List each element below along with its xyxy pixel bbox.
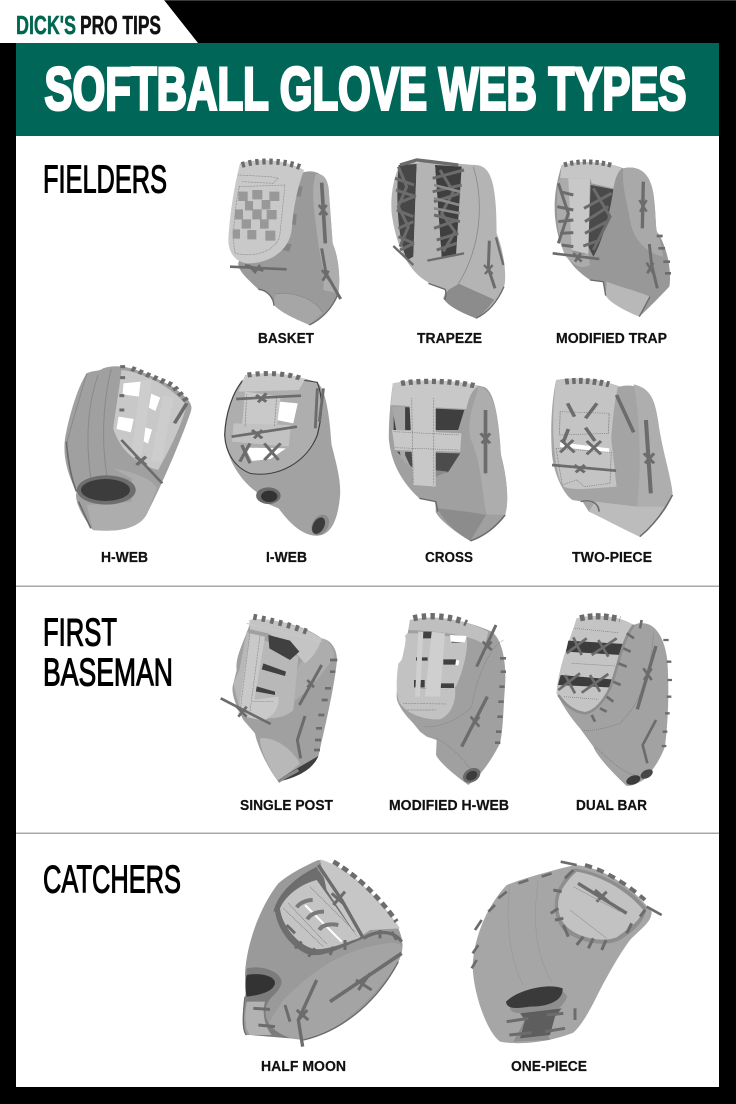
label: two-piece: TWO-PIECE bbox=[572, 550, 652, 566]
title banner bbox=[16, 43, 719, 136]
logo: Dick's Pro Tips: DICK'S bbox=[16, 10, 76, 40]
logo: Dick's Pro Tips: PRO TIPS bbox=[80, 10, 161, 40]
glove: modified h-web bbox=[397, 616, 506, 786]
label: i-web: I-WEB bbox=[266, 550, 307, 566]
label: h-web: H-WEB bbox=[101, 550, 148, 566]
glove: basket bbox=[228, 160, 341, 325]
label: single post: SINGLE POST bbox=[240, 798, 333, 814]
glove: modified trap bbox=[553, 162, 671, 317]
label: cross: CROSS bbox=[425, 550, 473, 566]
glove: i-web bbox=[225, 373, 340, 537]
heading: fielders: FIELDERS bbox=[43, 158, 167, 202]
glove: single post bbox=[221, 617, 337, 782]
label: half moon: HALF MOON bbox=[261, 1059, 346, 1075]
glove: two-piece bbox=[551, 378, 672, 537]
glove: half moon bbox=[243, 859, 403, 1047]
heading: first baseman bbox=[43, 612, 173, 694]
label: basket: BASKET bbox=[258, 331, 314, 347]
glove: dual bar bbox=[557, 616, 672, 787]
glove: trapeze bbox=[391, 160, 505, 318]
label: trapeze: TRAPEZE bbox=[417, 331, 482, 347]
heading: first baseman: BASEMAN bbox=[43, 652, 173, 694]
heading: first baseman: FIRST bbox=[43, 612, 117, 654]
heading: catchers: CATCHERS bbox=[43, 858, 181, 902]
glove: cross bbox=[389, 380, 507, 541]
label: modified h-web: MODIFIED H-WEB bbox=[389, 798, 509, 814]
label: one-piece: ONE-PIECE bbox=[511, 1059, 587, 1075]
logo: Dick's Pro Tips bbox=[0, 0, 198, 43]
glove: h-web bbox=[64, 366, 191, 531]
label: modified trap: MODIFIED TRAP bbox=[556, 331, 667, 347]
glove: one-piece bbox=[472, 862, 662, 1043]
label: dual bar: DUAL BAR bbox=[576, 798, 647, 814]
